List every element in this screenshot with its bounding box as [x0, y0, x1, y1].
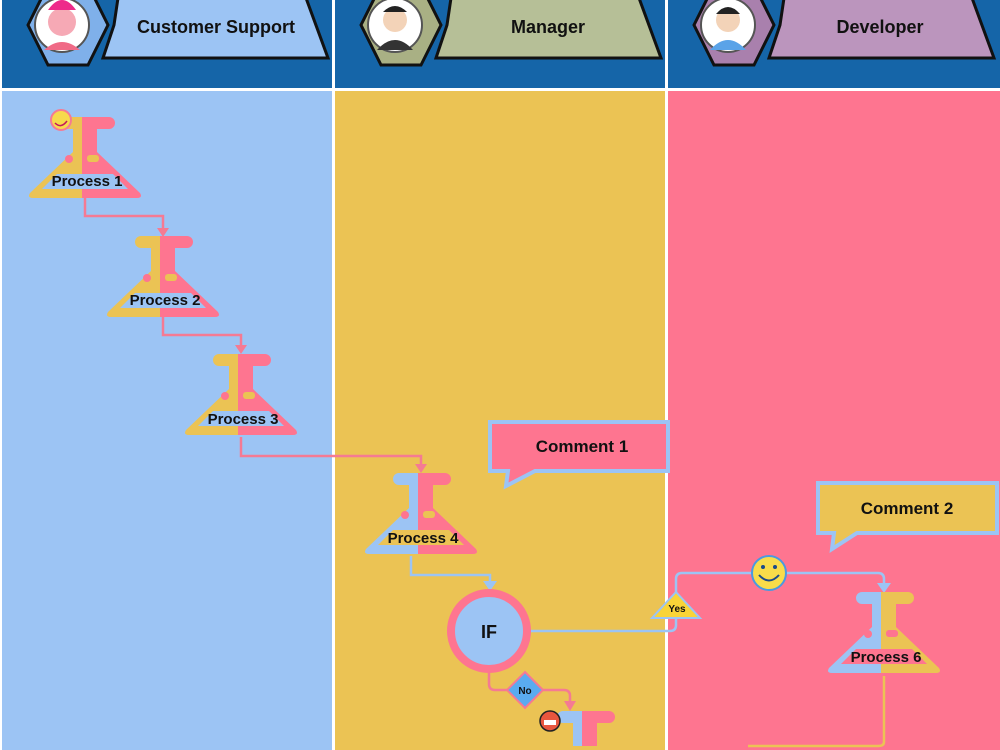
decision: IF: IF — [481, 622, 497, 642]
header: Developer: Developer — [836, 17, 924, 37]
callout: Comment 1: Comment 1 — [536, 437, 628, 456]
icon: smiley — [752, 556, 786, 590]
arrowheads — [157, 228, 891, 711]
flask: Process 1 — [29, 117, 141, 198]
connectors — [85, 198, 884, 746]
flask: Process 3: Process 3 — [208, 411, 278, 428]
flask: Process 4: Process 4 — [388, 530, 459, 547]
header: Customer Support — [28, 0, 328, 65]
flask: Process 6: Process 6 — [851, 649, 921, 666]
header: Developer — [694, 0, 994, 65]
flask: Process 5 (partial) — [557, 711, 615, 746]
header: Customer Support: Customer Support — [137, 17, 295, 37]
header: Manager — [361, 0, 661, 65]
callout: Comment 1 — [490, 422, 668, 486]
decision: IF — [451, 593, 527, 669]
flask: Process 4 — [365, 473, 477, 554]
flask: Process 2: Process 2 — [130, 292, 200, 309]
header: Manager: Manager — [511, 17, 585, 37]
flask: Process 2 — [107, 236, 219, 317]
flask: Process 1: Process 1 — [52, 173, 122, 190]
icon: wink face — [51, 110, 71, 130]
label: Yes — [652, 592, 700, 618]
flask: Process 3 — [185, 354, 297, 435]
flask: Process 6 — [828, 592, 940, 673]
icon: angry face — [540, 711, 560, 731]
label: No: No — [518, 686, 532, 697]
callout: Comment 2: Comment 2 — [861, 499, 953, 518]
callout: Comment 2 — [818, 483, 997, 549]
label: No — [507, 672, 543, 708]
label: Yes: Yes — [668, 604, 686, 615]
